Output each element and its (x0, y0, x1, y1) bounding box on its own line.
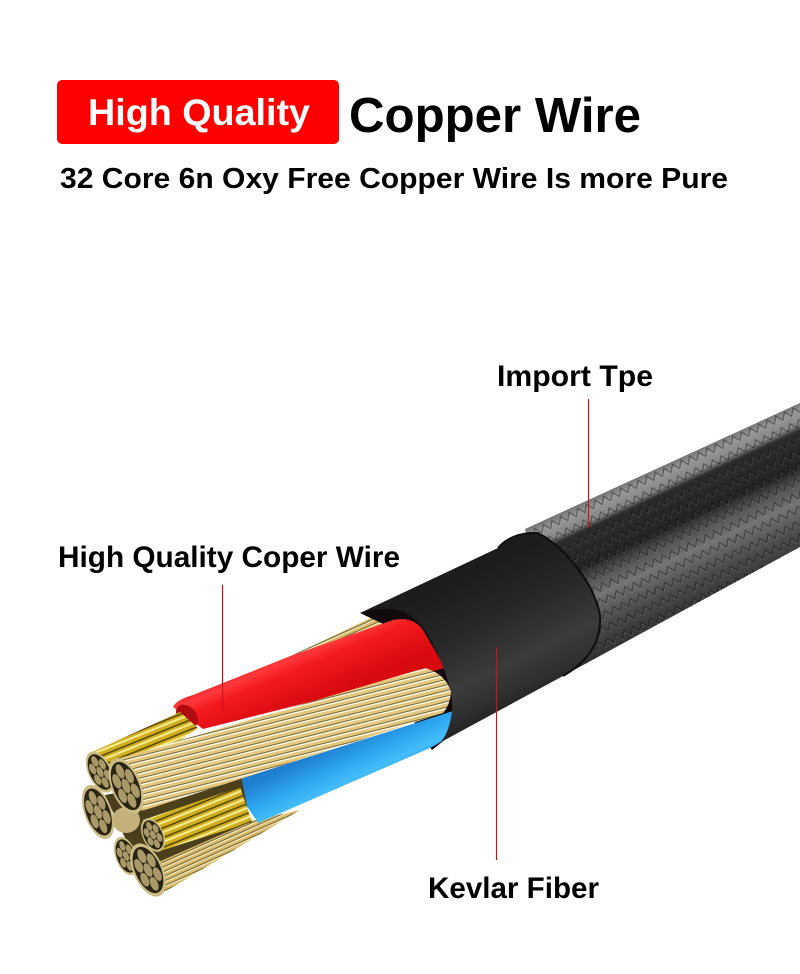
upper copper strand behind red (293, 616, 386, 668)
red wire (172, 619, 445, 732)
left copper end (77, 782, 119, 842)
blue wire (227, 711, 455, 823)
lower yellow conductor (137, 787, 252, 855)
badge: High Quality: High Quality (88, 91, 310, 133)
subtitle: 32 Core 6n Oxy Free Copper Wire Is more Pure (60, 163, 728, 195)
lower copper strand (155, 810, 300, 893)
front bottom end (124, 840, 172, 900)
label: Import Tpe: Import Tpe (497, 360, 653, 393)
opening shadow (360, 596, 470, 750)
kevlar sleeve (360, 533, 600, 748)
label: High Quality Coper Wire: High Quality Coper Wire (58, 541, 400, 574)
inner dark copper fill (105, 770, 250, 870)
sleeve rim (498, 533, 600, 676)
badge: High Quality (57, 80, 339, 144)
bottom small end (110, 835, 142, 877)
inner small copper core (112, 807, 140, 833)
big copper conductor (103, 668, 451, 817)
upper yellow conductor (81, 712, 198, 796)
cable illustration (77, 403, 800, 900)
braided jacket (525, 403, 800, 676)
label: Kevlar Fiber: Kevlar Fiber (428, 872, 599, 905)
title: Copper Wire (349, 89, 641, 143)
